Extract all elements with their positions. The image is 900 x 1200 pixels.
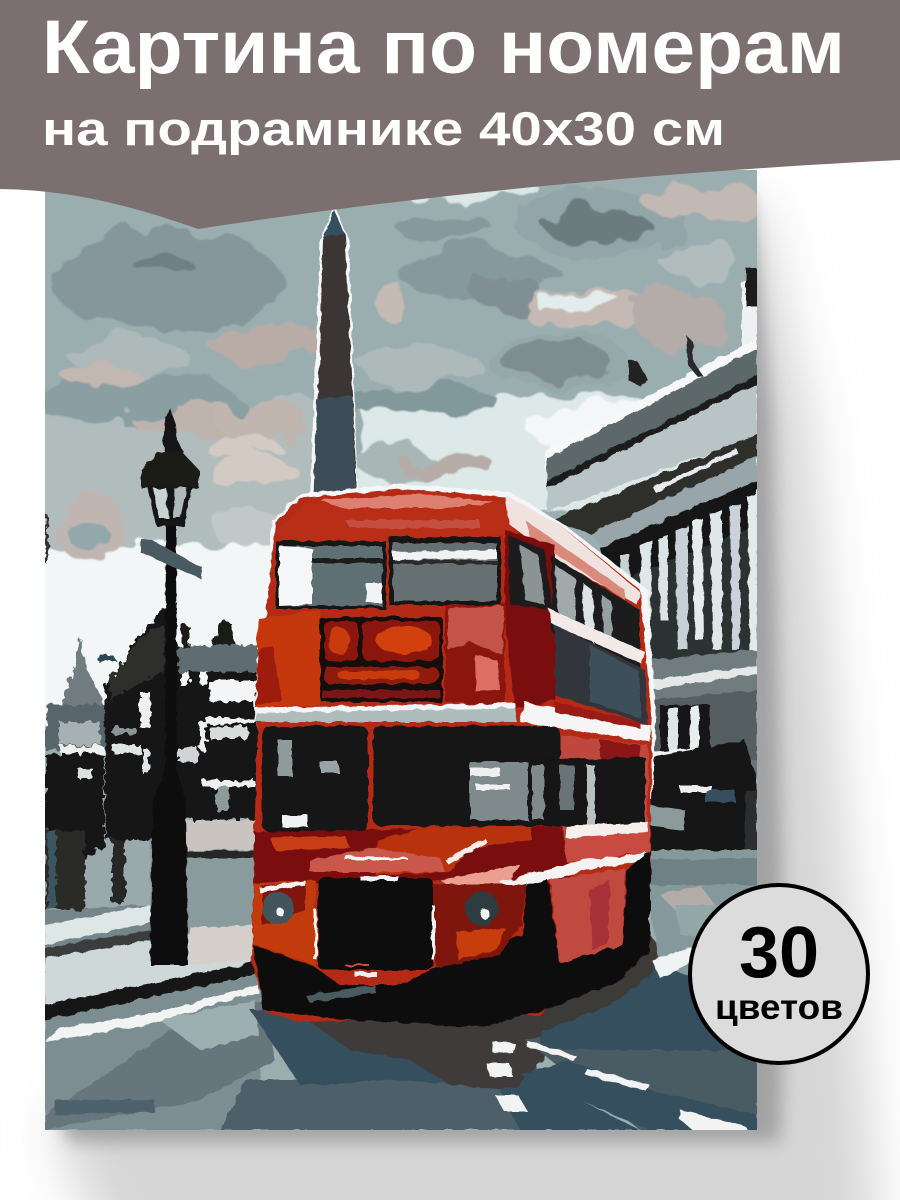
sky clouds: [0, 178, 780, 725]
destination box: [320, 617, 443, 702]
pavement: [45, 826, 254, 981]
subtitle: на подрамнике 40х30 см: [42, 102, 725, 155]
side panel: [550, 868, 625, 963]
upper front windows: [276, 541, 386, 609]
bonnet: [254, 826, 570, 884]
white halo and obelisk: [310, 205, 358, 500]
badge number: 30: [739, 913, 819, 993]
top banner: [0, 0, 900, 229]
white halo: [254, 484, 656, 800]
badge label: цветов: [715, 988, 843, 1027]
lower windows: [262, 726, 368, 832]
birds: [628, 335, 703, 386]
painting: London double-decker bus: [0, 170, 780, 1132]
street ground: [45, 820, 757, 1132]
distant buildings on left: [45, 515, 258, 910]
white strip: [256, 705, 517, 722]
badge: 30 colours: [690, 885, 868, 1063]
street lamp: [140, 408, 203, 965]
bus body: [252, 489, 652, 1022]
bumper and wheels: [253, 850, 650, 1027]
building on right: [545, 268, 758, 880]
upper side windows: [552, 556, 640, 680]
title: Картина по номерам: [42, 5, 845, 90]
front mudguards: [253, 880, 316, 966]
canvas drop shadow: [55, 190, 880, 1200]
headlights: [262, 892, 294, 924]
radiator grille: [318, 878, 433, 970]
double-decker bus: [252, 484, 656, 1027]
